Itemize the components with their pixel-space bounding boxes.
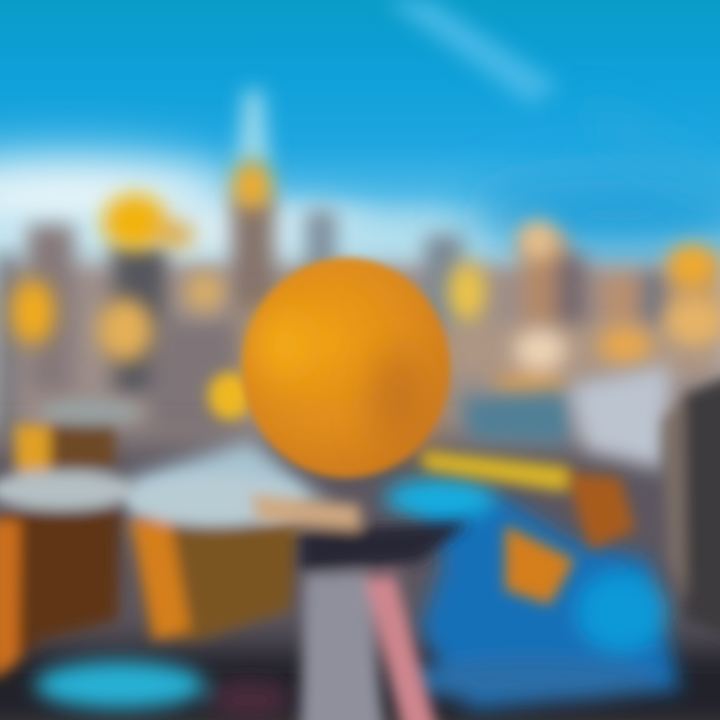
right dark building bbox=[662, 372, 720, 640]
skyline buildings bbox=[0, 195, 720, 478]
blue water and rooftops bbox=[35, 365, 680, 720]
lower city mass bbox=[0, 440, 720, 720]
golden building tops bbox=[11, 161, 720, 396]
empire-state style spire bbox=[236, 90, 270, 165]
left drum-shaped towers bbox=[0, 399, 303, 680]
yellow bar and orange shapes bbox=[420, 450, 635, 605]
central figure and pink ribbon bbox=[250, 495, 470, 720]
golden coin bbox=[208, 258, 450, 478]
